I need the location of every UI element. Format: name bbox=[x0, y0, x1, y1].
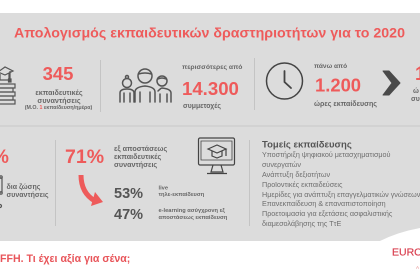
stat: cropped hours figure: συ bbox=[411, 96, 420, 103]
title: Απολογισμός εκπαιδευτικών δραστηριοτήτων για το 2020 bbox=[14, 26, 405, 40]
text: training areas list bbox=[262, 140, 420, 228]
stat: 1.200 training hours: ώρες εκπαίδευσης bbox=[314, 100, 377, 108]
text: remote meetings: εξ αποστάσεως bbox=[114, 144, 167, 153]
stat: 53% live: 53% bbox=[114, 186, 143, 202]
text: remote meetings: εκπαιδευτικές bbox=[114, 152, 162, 161]
text: training areas list: Ημερίδες για ανάπτυξη επαγγελματικών γνώσεων bbox=[262, 190, 420, 199]
text: training areas list: διαμεσολάβησης της ΤτΕ bbox=[262, 219, 341, 228]
icon: graduation cap on books bbox=[0, 67, 15, 104]
text: training areas list: συνεργατών bbox=[262, 160, 301, 169]
footer slogan: FFH. Τι έχει αξία για σένα; bbox=[0, 253, 130, 265]
stat: 47% e-learning bbox=[114, 207, 228, 223]
stat: cropped hours figure bbox=[411, 64, 420, 103]
stat: cropped hours figure: ώ bbox=[413, 88, 419, 95]
text: in-person meetings bbox=[6, 184, 49, 199]
text: training areas list: Προϊοντικές εκπαιδεύσεις bbox=[262, 180, 343, 189]
text: in-person meetings: συναντήσεις bbox=[6, 192, 49, 199]
stat: 345 meetings: εκπαιδευτικές bbox=[35, 88, 83, 97]
stat: 345 meetings: συναντήσεις bbox=[37, 96, 81, 105]
text: remote meetings: συναντήσεις bbox=[114, 160, 157, 169]
stat: 53% live bbox=[114, 186, 205, 202]
stat: 47% e-learning: e-learning ασύγχρονη εξ bbox=[158, 208, 225, 214]
text: remote meetings bbox=[114, 144, 167, 169]
icon: clock bbox=[266, 63, 302, 99]
stat: 345 meetings bbox=[25, 63, 93, 111]
logo: tagline fragment: A bbox=[416, 265, 419, 270]
text: in-person meetings: δια ζώσης bbox=[6, 184, 41, 191]
text: training areas list: Επανεκπαίδευση & επαναπιστοποίηση bbox=[262, 199, 386, 208]
arrow: red curved bbox=[81, 175, 103, 206]
icon: group of three people bbox=[120, 69, 171, 102]
stat: 14.300 participations: 14.300 bbox=[182, 78, 239, 99]
icon: cropped in-person meeting bbox=[0, 176, 2, 208]
stat: 53% live: τηλε-εκπαίδευση bbox=[158, 192, 205, 198]
stat: 14.300 participations: περισσότερες από bbox=[182, 64, 242, 71]
stat: 47% e-learning: αποστάσεως εκπαίδευση bbox=[158, 215, 228, 221]
stat: 345 meetings: (Μ.Ο. 1 εκπαίδευση/ημέρα) bbox=[25, 105, 93, 111]
heading: training areas: Τομείς εκπαίδευσης bbox=[262, 140, 352, 150]
stat: 1.200 training hours: πάνω από bbox=[314, 63, 347, 70]
stat: 47% e-learning: 47% bbox=[114, 207, 143, 223]
stat: 71% remote: 71% bbox=[65, 146, 104, 168]
text: training areas list: Υποστήριξη ψηφιακού μετασχηματισμού bbox=[262, 150, 391, 159]
stat: 53% live: live bbox=[158, 186, 168, 192]
stat: 14.300 participations: συμμετοχές bbox=[183, 103, 221, 110]
arrow: chevron bbox=[383, 71, 400, 95]
stat: 1.200 training hours: 1.200 bbox=[315, 74, 361, 96]
stat: 345 meetings: 345 bbox=[43, 63, 73, 84]
stat: 1.200 training hours bbox=[314, 63, 377, 108]
icon: monitor with graduation cap bbox=[198, 138, 234, 174]
text: training areas list: Ανάπτυξη δεξιοτήτων bbox=[262, 170, 330, 179]
stat: 14.300 participations bbox=[182, 64, 242, 110]
text: training areas list: Προετοιμασία για εξετάσεις ασφαλιστικής bbox=[262, 209, 393, 218]
